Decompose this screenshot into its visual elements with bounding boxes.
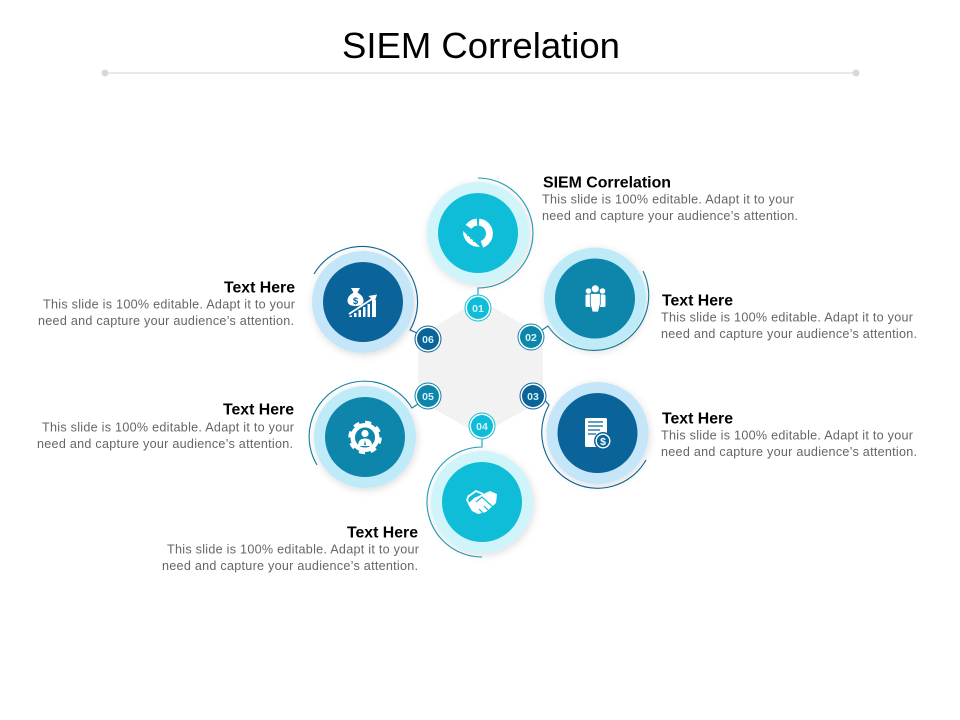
badge 04 [469,413,495,439]
text block 03: This slide is 100% editable. Adapt it to your [661,428,913,442]
badge 01 [465,295,491,321]
step 04 [427,413,533,557]
badge 05: 05 [422,391,434,403]
text block 05: This slide is 100% editable. Adapt it to your [42,420,294,434]
text block 06: Text Here [224,280,295,296]
icon: gear with person [350,422,380,452]
text block 02: need and capture your audience’s attention. [661,327,917,341]
badge 06: 06 [422,334,434,346]
text block 04: This slide is 100% editable. Adapt it to your [167,542,419,556]
text block 03: need and capture your audience’s attention. [661,445,917,459]
icon: handshake [467,491,497,514]
text block 04 [162,524,419,573]
text block 02 [661,292,917,341]
step 02 [518,248,649,350]
step 06 [312,246,441,353]
text block 05: need and capture your audience’s attention. [37,437,293,451]
central hexagon [418,304,543,430]
text block 05 [37,402,294,451]
text block 04: need and capture your audience’s attention. [162,559,418,573]
badge 01: 01 [472,303,484,315]
badge 03: 03 [527,391,539,403]
badge 02: 02 [525,332,537,344]
text block 06 [38,280,295,328]
text block 02: Text Here [662,292,733,310]
step 05 [309,381,441,488]
text block 06: need and capture your audience’s attention. [38,314,294,328]
icon: money bag and growth chart: $ [353,296,359,307]
title divider [102,70,860,76]
icon: donut chart [463,219,493,248]
text block 03: Text Here [662,410,733,428]
text block 06: This slide is 100% editable. Adapt it to your [43,298,295,312]
text block 05: Text Here [223,402,294,418]
text block 01: need and capture your audience’s attention. [542,209,798,223]
text block 04: Text Here [347,524,418,542]
text block 03 [661,410,917,459]
badge 04: 04 [476,421,488,433]
text block 01: SIEM Correlation [543,174,671,192]
text block 01: This slide is 100% editable. Adapt it to your [542,192,794,206]
text block 02: This slide is 100% editable. Adapt it to your [661,310,913,324]
step 01 [427,178,533,321]
title: SIEM Correlation [342,25,620,66]
icon: people group [586,285,606,312]
step 03 [520,382,648,488]
text block 01 [542,174,798,223]
icon: invoice with dollar: $ [600,436,606,448]
